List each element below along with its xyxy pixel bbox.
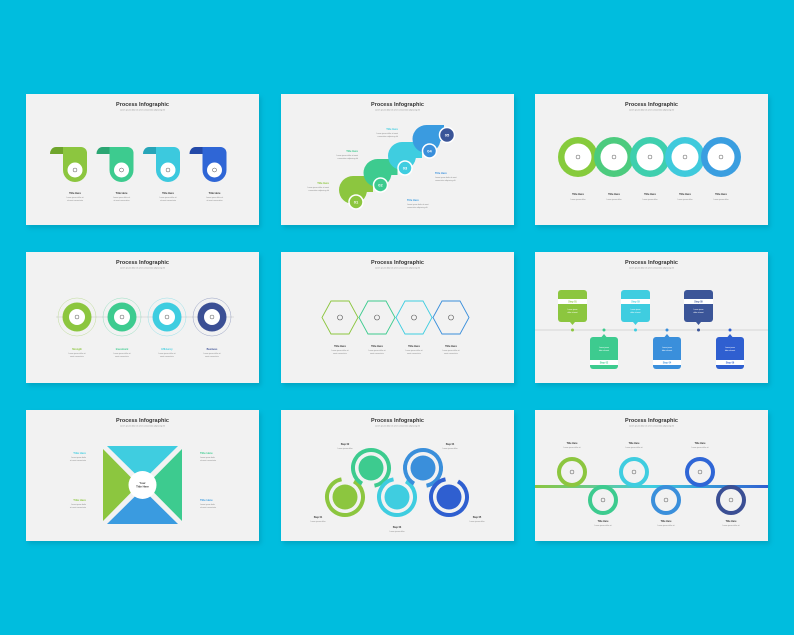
panel: slide 9 loop timeline: Title Here bbox=[567, 442, 578, 445]
panel: slide 4 connected circles: Investment bbox=[116, 348, 129, 351]
panel: slide 2 staircase steps: Lorem ipsum dolor sit amet bbox=[376, 132, 398, 135]
panel: slide 4 connected circles: amet consectetur bbox=[160, 355, 174, 358]
panel: slide 9 loop timeline: Title Here bbox=[695, 442, 706, 445]
panel: slide 9 loop timeline: Process Infographic bbox=[625, 418, 678, 424]
panel: slide 6 timeline boxes: Lorem ipsum bbox=[568, 308, 578, 311]
panel: slide 3 five rings: Lorem ipsum dolor bbox=[678, 199, 693, 201]
panel: slide 3 five rings: Title Here bbox=[715, 192, 727, 196]
panel: slide 6 timeline boxes: Step 05 bbox=[694, 301, 703, 304]
panel: slide 7 four triangles: sit amet consectetur bbox=[70, 506, 86, 509]
panel: slide 4 connected circles bbox=[26, 252, 261, 386]
panel: slide 9 loop timeline: Lorem ipsum dolor sit amet consectetur adipiscing elit bbox=[629, 424, 674, 428]
panel: slide 2 staircase steps: 03 bbox=[403, 166, 408, 170]
panel: slide 4 connected circles: amet consectetur bbox=[205, 355, 219, 358]
panel: slide 7 four triangles: Title Here bbox=[200, 498, 213, 502]
panel: slide 3 five rings: Lorem ipsum dolor sit amet consectetur adipiscing elit bbox=[629, 108, 674, 112]
panel: slide 6 timeline boxes: dolor sit amet bbox=[662, 349, 673, 352]
panel: slide 6 timeline boxes: dolor sit amet bbox=[630, 311, 641, 314]
panel: slide 3 five rings: Title Here bbox=[644, 192, 656, 196]
panel: slide 4 connected circles: Lorem ipsum dolor sit bbox=[68, 352, 86, 355]
panel: slide 1 tabs: Title Here bbox=[116, 191, 128, 195]
panel: slide 6 timeline boxes: dolor sit amet bbox=[693, 311, 704, 314]
panel: slide 3 five rings: Lorem ipsum dolor bbox=[571, 199, 586, 201]
panel: slide 6 timeline boxes: Lorem ipsum bbox=[694, 308, 704, 311]
panel: slide 2 staircase steps: consectetur adipiscing elit bbox=[377, 135, 398, 138]
panel: slide 8 wave rings: Step 05 bbox=[473, 516, 482, 519]
panel: slide 6 timeline boxes: dolor sit amet bbox=[599, 349, 610, 352]
panel: slide 7 four triangles: Title Here bbox=[73, 498, 86, 502]
panel: slide 7 four triangles: sit amet consectetur bbox=[200, 506, 216, 509]
panel: slide 2 staircase steps: Lorem ipsum dolor sit amet bbox=[435, 176, 457, 179]
panel: slide 3 five rings: Title Here bbox=[572, 192, 584, 196]
panel: slide 6 timeline boxes: Step 01 bbox=[568, 301, 577, 304]
panel: slide 6 timeline boxes: Lorem ipsum bbox=[725, 346, 735, 349]
panel: slide 2 staircase steps: Title Here bbox=[386, 127, 399, 131]
panel: slide 2 staircase steps: 04 bbox=[427, 148, 432, 154]
panel: slide 1 tabs: Title Here bbox=[162, 191, 174, 195]
panel: slide 2 staircase steps: consectetur adipiscing elit bbox=[308, 189, 329, 192]
panel: slide 4 connected circles: Process Infographic bbox=[116, 260, 169, 266]
panel: slide 8 wave rings: Step 02 bbox=[341, 443, 350, 446]
panel: slide 2 staircase steps: 05 bbox=[445, 132, 450, 138]
panel: slide 4 connected circles: Business bbox=[207, 348, 218, 351]
panel: slide 7 four triangles: Lorem ipsum dolor bbox=[71, 457, 86, 459]
panel: slide 1 tabs: sit amet consectetur bbox=[113, 199, 130, 202]
panel: slide 6 timeline boxes: Lorem ipsum bbox=[631, 308, 641, 311]
panel: slide 9 loop timeline: Title Here bbox=[726, 520, 737, 523]
panel: slide 2 staircase steps: Process Infographic bbox=[371, 102, 424, 108]
panel: slide 4 connected circles: Strength bbox=[72, 348, 82, 351]
panel: slide 3 five rings: Lorem ipsum dolor bbox=[607, 199, 622, 201]
panel: slide 8 wave rings: Lorem ipsum dolor bbox=[390, 531, 405, 533]
panel: slide 1 tabs: Title Here bbox=[209, 191, 221, 195]
panel: slide 1 tabs: sit amet consectetur bbox=[206, 199, 223, 202]
panel: slide 1 tabs: Lorem ipsum dolor sit bbox=[206, 196, 224, 199]
panel: slide 5 hexagons: Title Here bbox=[334, 344, 346, 348]
panel: slide 1 tabs: Lorem ipsum dolor sit bbox=[159, 196, 177, 199]
panel: slide 5 hexagons: Title Here bbox=[371, 344, 383, 348]
panel: slide 5 hexagons: Lorem ipsum dolor sit bbox=[331, 349, 349, 352]
panel: slide 2 staircase steps: Lorem ipsum dolor sit amet bbox=[307, 186, 329, 189]
panel: slide 4 connected circles: Lorem ipsum dolor sit bbox=[113, 352, 131, 355]
panel: slide 9 loop timeline: Lorem ipsum dolor sit bbox=[625, 446, 643, 449]
panel: slide 4 connected circles: amet consectetur bbox=[70, 355, 84, 358]
panel: slide 7 four triangles: Lorem ipsum dolor bbox=[200, 457, 215, 459]
panel: slide 9 loop timeline bbox=[535, 410, 770, 544]
panel: slide 1 tabs: Lorem ipsum dolor sit bbox=[66, 196, 84, 199]
panel: slide 8 wave rings: Lorem ipsum dolor bbox=[443, 448, 458, 450]
panel: slide 6 timeline boxes bbox=[535, 252, 770, 386]
panel: slide 8 wave rings: Step 01 bbox=[314, 516, 323, 519]
panel: slide 2 staircase steps: Title Here bbox=[407, 198, 419, 202]
panel: slide 6 timeline boxes: dolor sit amet bbox=[567, 311, 578, 314]
panel: slide 3 five rings: Process Infographic bbox=[625, 102, 678, 108]
panel: slide 5 hexagons: Lorem ipsum dolor sit bbox=[368, 349, 386, 352]
panel: slide 5 hexagons: Title Here bbox=[445, 344, 457, 348]
panel: slide 9 loop timeline: Lorem ipsum dolor sit bbox=[657, 524, 675, 527]
panel: slide 4 connected circles: Lorem ipsum dolor sit bbox=[203, 352, 221, 355]
panel: slide 7 four triangles: Lorem ipsum dolor bbox=[200, 504, 215, 506]
panel: slide 6 timeline boxes: Step 03 bbox=[631, 301, 640, 304]
panel: slide 2 staircase steps: Lorem ipsum dolor sit amet bbox=[407, 203, 429, 206]
panel: slide 9 loop timeline: Title Here bbox=[661, 520, 672, 523]
panel: slide 7 four triangles: Lorem ipsum dolor sit amet consectetur adipiscing elit bbox=[120, 424, 165, 428]
panel: slide 3 five rings: Lorem ipsum dolor bbox=[643, 199, 658, 201]
panel: slide 5 hexagons: Lorem ipsum dolor sit amet consectetur adipiscing elit bbox=[375, 266, 420, 270]
panel: slide 6 timeline boxes: Step 04 bbox=[663, 362, 672, 365]
panel: slide 4 connected circles: amet consectetur bbox=[115, 355, 129, 358]
panel: slide 3 five rings: Lorem ipsum dolor bbox=[714, 199, 729, 201]
panel: slide 8 wave rings: Lorem ipsum dolor sit amet consectetur adipiscing elit bbox=[375, 424, 420, 428]
panel: slide 9 loop timeline: Lorem ipsum dolor sit bbox=[594, 524, 612, 527]
panel: slide 5 hexagons: amet consectetur bbox=[444, 352, 458, 355]
panel: slide 1 tabs: Lorem ipsum dolor sit bbox=[113, 196, 131, 199]
panel: slide 5 hexagons: Lorem ipsum dolor sit bbox=[442, 349, 460, 352]
panel: slide 7 four triangles: Title Here bbox=[200, 451, 213, 455]
panel: slide 2 staircase steps: Title Here bbox=[346, 149, 359, 153]
panel: slide 4 connected circles: Lorem ipsum dolor sit amet consectetur adipiscing elit bbox=[120, 266, 165, 270]
panel: slide 2 staircase steps: consectetur adipiscing elit bbox=[337, 157, 358, 160]
panel: slide 5 hexagons: amet consectetur bbox=[370, 352, 384, 355]
panel: slide 1 tabs: sit amet consectetur bbox=[67, 199, 83, 202]
panel: slide 8 wave rings bbox=[281, 410, 516, 544]
panel: slide 5 hexagons: amet consectetur bbox=[407, 352, 421, 355]
panel: slide 4 connected circles: Lorem ipsum dolor sit bbox=[158, 352, 176, 355]
panel: slide 9 loop timeline: Lorem ipsum dolor sit bbox=[722, 524, 740, 527]
panel: slide 7 four triangles: Your bbox=[139, 481, 146, 485]
panel: slide 6 timeline boxes: Step 06 bbox=[726, 362, 735, 365]
panel: slide 6 timeline boxes: Lorem ipsum dolor sit amet consectetur adipiscing elit bbox=[629, 266, 674, 270]
panel: slide 9 loop timeline: Title Here bbox=[629, 442, 640, 445]
panel: slide 2 staircase steps: Title Here bbox=[317, 181, 330, 185]
panel: slide 8 wave rings: Lorem ipsum dolor bbox=[338, 448, 353, 450]
panel: slide 6 timeline boxes: Step 02 bbox=[600, 362, 609, 365]
panel: slide 5 hexagons bbox=[281, 252, 516, 386]
panel: slide 6 timeline boxes: dolor sit amet bbox=[725, 349, 736, 352]
panel: slide 2 staircase steps: consectetur adipiscing elit bbox=[435, 179, 456, 182]
panel: slide 1 tabs: Process Infographic bbox=[116, 102, 169, 108]
panel: slide 2 staircase steps: consectetur adipiscing elit bbox=[407, 206, 428, 209]
panel: slide 1 tabs: sit amet consectetur bbox=[160, 199, 176, 202]
panel: slide 5 hexagons: Lorem ipsum dolor sit bbox=[405, 349, 423, 352]
panel: slide 2 staircase steps: Lorem ipsum dolor sit amet consectetur adipiscing elit bbox=[375, 108, 420, 112]
panel: slide 6 timeline boxes: Lorem ipsum bbox=[599, 346, 609, 349]
panel: slide 8 wave rings: Step 04 bbox=[446, 443, 455, 446]
panel: slide 8 wave rings: Process Infographic bbox=[371, 418, 424, 424]
panel: slide 7 four triangles: sit amet consectetur bbox=[200, 459, 216, 462]
panel: slide 2 staircase steps: 01 bbox=[354, 200, 359, 204]
panel: slide 3 five rings bbox=[535, 94, 770, 228]
panel: slide 1 tabs: Lorem ipsum dolor sit amet consectetur adipiscing elit bbox=[120, 108, 165, 112]
panel: slide 3 five rings: Title Here bbox=[679, 192, 691, 196]
panel: slide 7 four triangles: Lorem ipsum dolor bbox=[71, 504, 86, 506]
panel: slide 9 loop timeline: Title Here bbox=[598, 520, 609, 523]
panel: slide 8 wave rings: Lorem ipsum dolor bbox=[470, 521, 485, 523]
panel: slide 8 wave rings: Step 03 bbox=[393, 526, 402, 529]
panel: slide 4 connected circles: Efficiency bbox=[161, 348, 173, 351]
panel: slide 2 staircase steps: Title Here bbox=[435, 171, 447, 175]
panel: slide 2 staircase steps: 02 bbox=[378, 182, 383, 188]
panel: slide 1 tabs bbox=[26, 94, 261, 228]
panel: slide 5 hexagons: Title Here bbox=[408, 344, 420, 348]
panel: slide 6 timeline boxes: Process Infographic bbox=[625, 260, 678, 266]
panel: slide 7 four triangles: sit amet consectetur bbox=[70, 459, 86, 462]
panel: slide 3 five rings: Title Here bbox=[608, 192, 620, 196]
panel: slide 9 loop timeline: Lorem ipsum dolor sit bbox=[691, 446, 709, 449]
panel: slide 6 timeline boxes: Lorem ipsum bbox=[662, 346, 672, 349]
panel: slide 7 four triangles bbox=[26, 410, 261, 544]
panel: slide 8 wave rings: Lorem ipsum dolor bbox=[311, 521, 326, 523]
panel: slide 9 loop timeline: Lorem ipsum dolor sit bbox=[563, 446, 581, 449]
panel: slide 7 four triangles: Title Here bbox=[136, 484, 149, 488]
panel: slide 1 tabs: Title Here bbox=[69, 191, 81, 195]
panel: slide 7 four triangles: Title Here bbox=[73, 451, 86, 455]
panel: slide 2 staircase steps bbox=[281, 94, 516, 228]
panel: slide 2 staircase steps: Lorem ipsum dolor sit amet bbox=[336, 154, 358, 157]
panel: slide 5 hexagons: amet consectetur bbox=[333, 352, 347, 355]
panel: slide 5 hexagons: Process Infographic bbox=[371, 260, 424, 266]
panel: slide 7 four triangles: Process Infographic bbox=[116, 418, 169, 424]
